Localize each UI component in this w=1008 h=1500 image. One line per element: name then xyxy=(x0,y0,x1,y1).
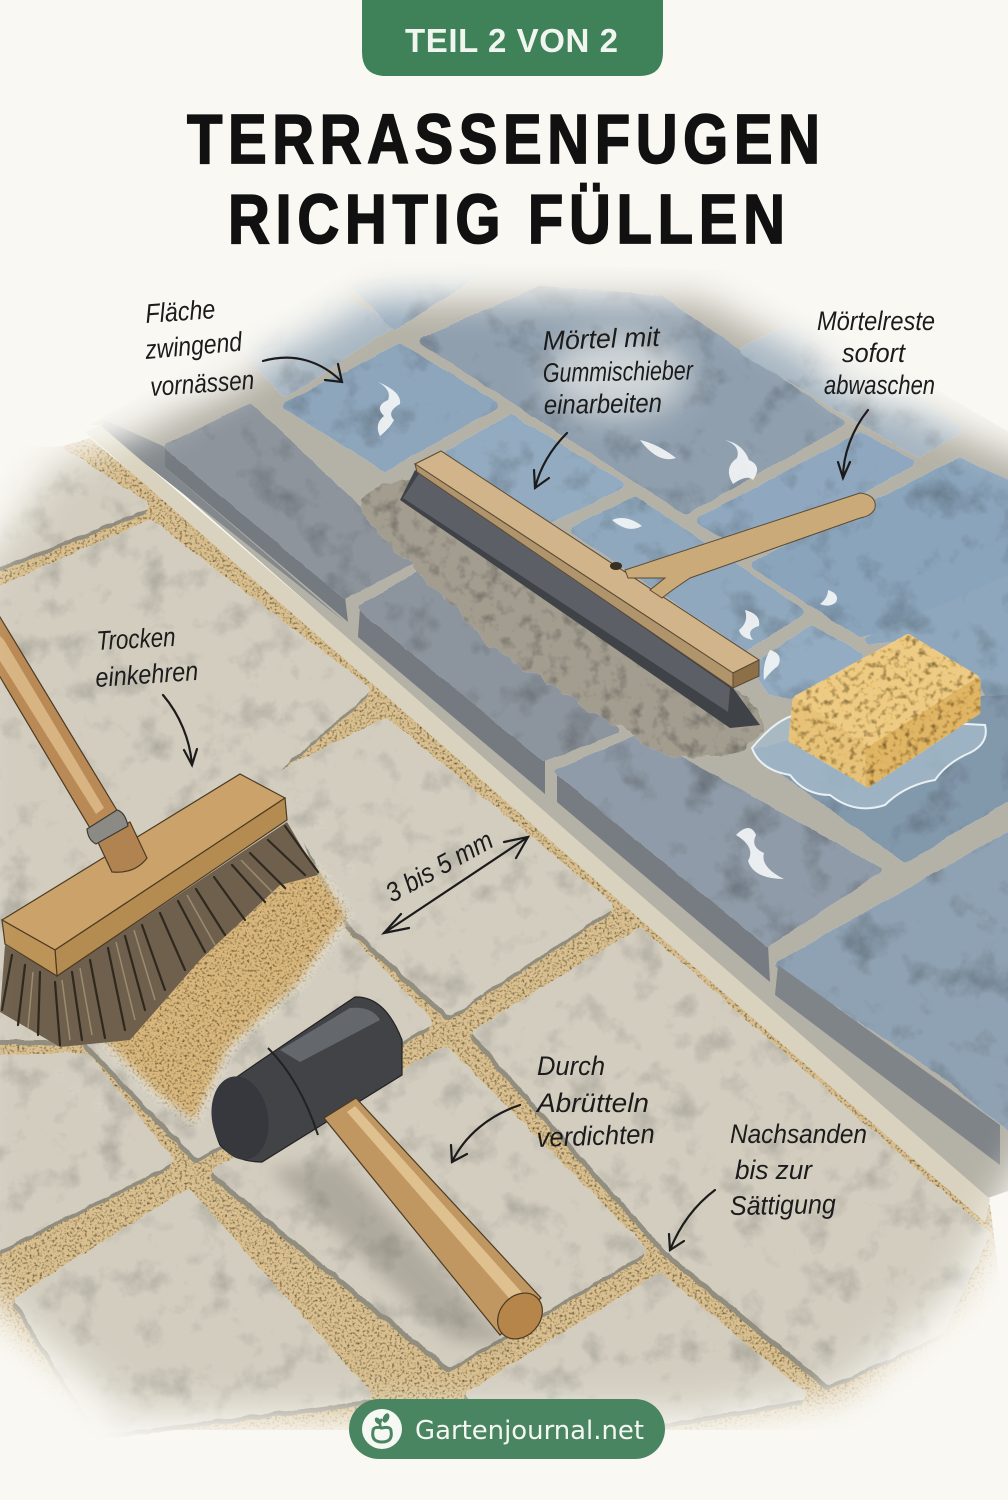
callout: wash off mortar residue: sofort xyxy=(842,338,906,368)
callout: compact by tamping xyxy=(535,1051,655,1153)
callout: wet the surface: zwingend xyxy=(143,327,244,365)
broom head xyxy=(2,774,285,950)
callout: mortar with squeegee: Gummischieber xyxy=(543,355,694,388)
pale washed-out patches behind labels xyxy=(135,315,940,417)
icon: plant in pot xyxy=(362,1409,402,1449)
title xyxy=(187,100,820,258)
callout: re-sand until saturated: Sättigung xyxy=(730,1189,836,1221)
sand pile near broom xyxy=(100,861,352,1126)
badge: part 2 of 2 xyxy=(362,0,663,76)
arrow: to squeegee xyxy=(534,433,567,488)
callout: re-sand until saturated xyxy=(730,1119,867,1221)
icon: mortar smear xyxy=(362,480,762,758)
arrow: to mallet stone xyxy=(451,1105,520,1162)
icon: squeegee xyxy=(400,451,875,728)
dimension: joint width 3 to 5 mm xyxy=(380,825,528,933)
panel: wet blue paving stones xyxy=(235,270,1008,1135)
squeegee handle xyxy=(625,493,875,598)
callout: mortar with squeegee: Mörtel mit xyxy=(542,322,662,356)
callout: mortar with squeegee: einarbeiten xyxy=(544,388,662,420)
footer logo pill: Gartenjournal.net xyxy=(415,1416,644,1446)
squeegee bar xyxy=(415,451,759,673)
badge: part 2 of 2: TEIL 2 VON 2 xyxy=(405,22,618,59)
callout: wash off mortar residue: Mörtelreste xyxy=(817,306,935,336)
curb xyxy=(85,425,990,1222)
dimension: joint width 3 to 5 mm: 3 bis 5 mm xyxy=(380,825,498,908)
panel: grey paving stones along the curb xyxy=(168,407,878,943)
icon: sponge xyxy=(791,637,978,785)
broom socket and ferrule xyxy=(96,822,147,872)
panel: beige paving stones xyxy=(0,450,985,1430)
callout: re-sand until saturated: bis zur xyxy=(735,1155,813,1185)
callout: mortar with squeegee xyxy=(542,322,694,420)
shadow beside hammer xyxy=(270,1160,510,1345)
illustration: patio scene xyxy=(0,260,1008,1430)
joint base: mortar area xyxy=(90,260,1008,1199)
footer logo pill xyxy=(349,1399,665,1459)
callout: wet the surface: vornässen xyxy=(149,365,255,402)
icon: puddle xyxy=(752,715,986,808)
icon: rubber mallet xyxy=(205,997,552,1348)
arrow: to blue stone xyxy=(838,410,868,478)
curb stone strip and side faces xyxy=(100,420,1000,1165)
callout: sweep in dry xyxy=(94,622,199,693)
arrow: to wet stone xyxy=(263,358,342,382)
title: RICHTIG FÜLLEN xyxy=(228,180,785,258)
callout: re-sand until saturated: Nachsanden xyxy=(730,1119,867,1149)
callout: compact by tamping: Abrütteln xyxy=(535,1088,649,1118)
callout: compact by tamping: Durch xyxy=(537,1051,605,1081)
title: TERRASSENFUGEN xyxy=(187,100,820,178)
water highlights xyxy=(378,382,837,879)
callout: sweep in dry: einkehren xyxy=(94,656,199,693)
squeegee blade xyxy=(400,470,760,728)
sand base of the beige terrace xyxy=(0,438,1008,1430)
callout: compact by tamping: verdichten xyxy=(536,1119,655,1153)
callout: wash off mortar residue xyxy=(817,306,935,400)
arrow: to broom xyxy=(163,695,197,765)
broom stick xyxy=(0,600,118,828)
icon: broom xyxy=(0,600,318,1047)
callout: wet the surface xyxy=(143,294,255,402)
arrow: to sand joint xyxy=(669,1190,715,1250)
callout: wet the surface: Fläche xyxy=(144,294,216,329)
mallet handle xyxy=(324,1098,541,1335)
callout: wash off mortar residue: abwaschen xyxy=(824,370,935,400)
mallet head xyxy=(213,997,402,1162)
callout: sweep in dry: Trocken xyxy=(96,622,176,656)
broom bristles xyxy=(0,822,318,1047)
